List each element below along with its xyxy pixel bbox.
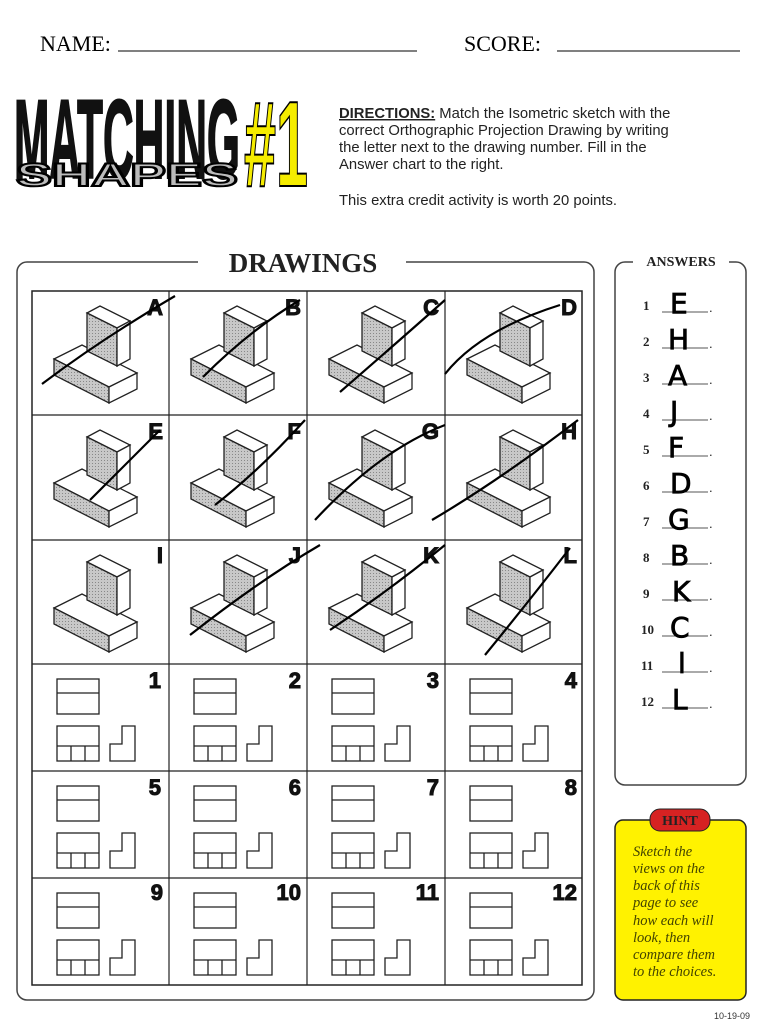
answer rows: 7: [643, 514, 650, 529]
handwritten answers: K: [672, 575, 691, 608]
date: 10-19-09: [714, 1011, 750, 1021]
directions: This extra credit activity is worth 20 points.: [339, 193, 617, 209]
handwritten answers: G: [668, 503, 690, 536]
orthographic drawings: [57, 679, 548, 975]
name field: NAME:: [40, 31, 111, 56]
panel: answers: .: [709, 480, 713, 495]
hint text: page to see: [632, 895, 699, 911]
handwritten answers: D: [670, 467, 692, 500]
pen strike lines: [42, 296, 578, 655]
hint text: Sketch the: [633, 844, 693, 860]
panel: answers: .: [709, 588, 713, 603]
hint badge: HINT: [662, 814, 699, 829]
panel: answers: .: [709, 516, 713, 531]
heading: drawings: DRAWINGS: [229, 248, 377, 278]
cell letters and numbers: 12: [553, 880, 577, 905]
cell letters and numbers: A: [147, 295, 163, 320]
handwritten answers: J: [668, 395, 678, 428]
hint text: [632, 844, 716, 980]
panel: answers: .: [709, 300, 713, 315]
text: #1: [244, 76, 308, 212]
answer rows: 3: [643, 370, 650, 385]
cell letters and numbers: G: [422, 419, 439, 444]
panel: answers: .: [709, 552, 713, 567]
directions: the letter next to the drawing number. Fill in the: [339, 140, 647, 156]
panel: answers: .: [709, 660, 713, 675]
panel: hint: [615, 809, 746, 1000]
panel: answers: .: [709, 372, 713, 387]
cell letters and numbers: 9: [151, 880, 163, 905]
cell letters and numbers: K: [423, 543, 439, 568]
cell letters and numbers: 4: [565, 668, 578, 693]
cell letters and numbers: 2: [289, 668, 301, 693]
cell letters and numbers: 8: [565, 775, 577, 800]
cell letters and numbers: 7: [427, 775, 439, 800]
cell letters and numbers: 5: [149, 775, 161, 800]
cell letters and numbers: 10: [277, 880, 301, 905]
isometric sketches: [54, 306, 550, 652]
cell letters and numbers: 3: [427, 668, 439, 693]
cell letters and numbers: C: [423, 295, 439, 320]
hint badge: [650, 809, 710, 831]
hint text: compare them: [633, 947, 715, 963]
cell letters and numbers: 1: [149, 668, 161, 693]
directions: Answer chart to the right.: [339, 157, 504, 173]
handwritten answers: [668, 287, 692, 716]
handwritten answers: H: [668, 323, 689, 356]
cell letters and numbers: J: [289, 543, 301, 568]
answer rows: 8: [643, 550, 650, 565]
directions: [339, 106, 670, 209]
panel: answers: .: [709, 696, 713, 711]
answer rows: [641, 298, 654, 709]
cell letters and numbers: B: [285, 295, 301, 320]
answer rows: 1: [643, 298, 650, 313]
hint text: to the choices.: [633, 964, 716, 980]
panel: answers: .: [709, 624, 713, 639]
hint text: look, then: [633, 930, 690, 946]
title: SHAPES: [16, 157, 238, 193]
answer rows: 2: [643, 334, 650, 349]
hint text: how each will: [633, 913, 714, 929]
handwritten answers: L: [672, 683, 688, 716]
handwritten answers: F: [668, 431, 684, 464]
panel: answers: .: [709, 444, 713, 459]
answer rows: 4: [643, 406, 650, 421]
cell letters and numbers: I: [157, 543, 163, 568]
answer rows: 12: [641, 694, 654, 709]
cell letters and numbers: 6: [289, 775, 301, 800]
panel: answers: .: [709, 336, 713, 351]
cell letters and numbers: 11: [416, 880, 439, 905]
cell letters and numbers: E: [148, 419, 163, 444]
score field: SCORE:: [464, 31, 541, 56]
cell letters and numbers: D: [561, 295, 577, 320]
cell letters and numbers: F: [288, 419, 301, 444]
handwritten answers: l: [678, 647, 686, 680]
cell letters and numbers: L: [564, 543, 577, 568]
answer rows: 10: [641, 622, 654, 637]
answer rows: 5: [643, 442, 650, 457]
answer rows: 6: [643, 478, 650, 493]
hint text: back of this: [633, 878, 700, 894]
answer rows: 9: [643, 586, 650, 601]
panel: drawings: [17, 248, 594, 1000]
handwritten answers: A: [668, 359, 687, 392]
text: MATCHING: [14, 77, 240, 202]
answer rows: 11: [641, 658, 653, 673]
handwritten answers: E: [670, 287, 688, 320]
cell letters and numbers: [147, 295, 578, 905]
heading: answers: ANSWERS: [646, 255, 716, 270]
directions: correct Orthographic Projection Drawing by writing: [339, 123, 669, 139]
cell letters and numbers: H: [561, 419, 577, 444]
directions: DIRECTIONS: Match the Isometric sketch with the: [339, 106, 670, 122]
title: [14, 76, 308, 212]
handwritten answers: C: [670, 611, 690, 644]
handwritten answers: B: [670, 539, 689, 572]
panel: answers: [615, 250, 746, 785]
hint text: views on the: [633, 861, 705, 877]
panel: answers: .: [709, 408, 713, 423]
